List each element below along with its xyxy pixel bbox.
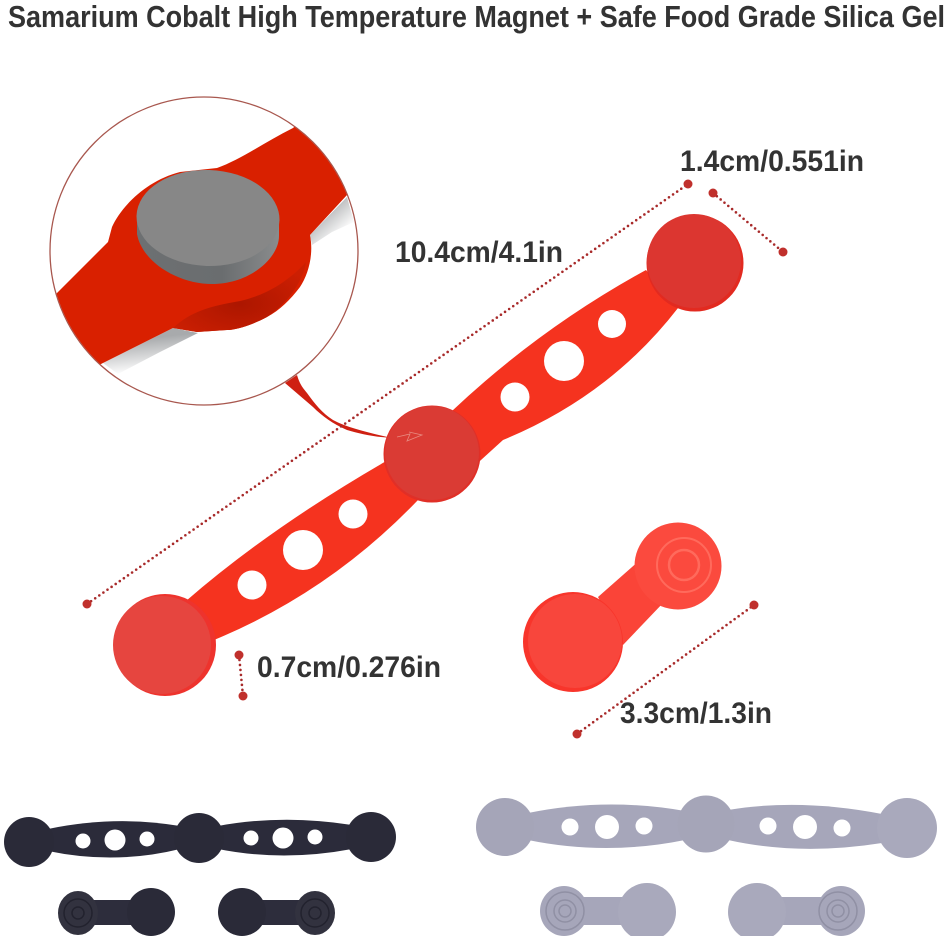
black short straps xyxy=(58,888,335,936)
short red strap xyxy=(523,522,722,692)
dimension label: thickness: 0.7cm/0.276in xyxy=(257,651,441,684)
long red strap xyxy=(113,214,744,696)
dimension: short strap xyxy=(572,600,758,738)
magnet face xyxy=(135,168,281,268)
black long strap xyxy=(4,812,396,867)
dimension label: short strap: 3.3cm/1.3in xyxy=(620,697,772,730)
dimension: length xyxy=(82,180,692,608)
magnet side xyxy=(137,218,279,284)
strap section: lower xyxy=(186,460,418,640)
red strap and magnet seat xyxy=(56,127,347,364)
dimension: width xyxy=(708,188,788,256)
magnet cap: bottom xyxy=(113,594,216,696)
dimension: thickness xyxy=(234,650,248,700)
magnet cap: top xyxy=(646,214,744,312)
grey long strap xyxy=(476,796,937,858)
strap holes xyxy=(238,310,626,600)
strap section: upper xyxy=(452,270,678,470)
inset: magnet close-up xyxy=(45,97,360,405)
grey short straps xyxy=(540,883,865,941)
dimension label: length: 10.4cm/4.1in xyxy=(395,236,563,269)
magnet cap: centre xyxy=(384,406,480,502)
pointer from inset to centre magnet xyxy=(285,375,392,438)
strap shadows xyxy=(103,328,198,374)
seat shading xyxy=(173,262,306,332)
dimension label: width: 1.4cm/0.551in xyxy=(680,145,864,178)
